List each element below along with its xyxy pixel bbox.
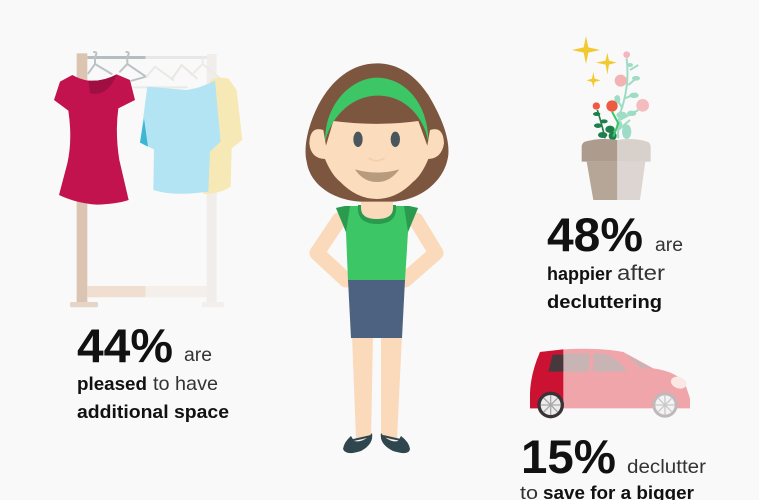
stat: 15 percent: [520, 430, 707, 500]
stat: 48 percent: after: [617, 262, 665, 285]
green top: [336, 206, 418, 281]
stat: 15 percent: declutter: [627, 457, 707, 478]
stat: 15 percent: 15%: [521, 430, 616, 483]
sparkles: [572, 36, 617, 87]
shoes: [343, 433, 410, 453]
figure: woman: [306, 63, 448, 453]
icon: potted plant with sparkles: [572, 36, 651, 200]
stat: 48 percent: are: [655, 235, 683, 256]
stat: 44 percent: [77, 319, 229, 422]
stat: 44 percent: pleased: [77, 373, 147, 394]
head: [306, 63, 448, 202]
stat: 48 percent: decluttering: [547, 291, 662, 312]
stat: 44 percent: additional space: [77, 401, 229, 422]
collar: [358, 205, 396, 224]
skirt: [348, 280, 405, 338]
neck: [361, 190, 393, 219]
stat: 44 percent: to have: [153, 373, 218, 395]
legs: [352, 335, 402, 440]
stat: 48 percent: happier: [547, 263, 612, 284]
arms: [317, 220, 436, 280]
stat: 44 percent: are: [184, 345, 212, 366]
stat: 48 percent: 48%: [547, 208, 643, 261]
stat: 48 percent: [547, 208, 683, 312]
icon: car: [530, 349, 690, 418]
icon: clothes rack: [54, 52, 242, 307]
stat: 44 percent: 44%: [77, 319, 173, 372]
